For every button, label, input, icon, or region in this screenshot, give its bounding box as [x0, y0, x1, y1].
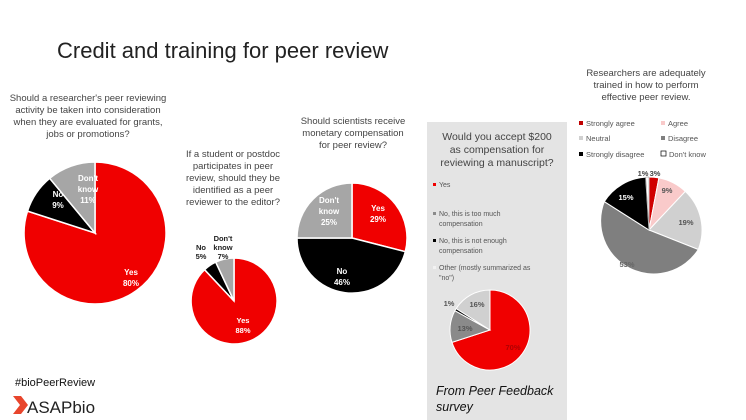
question 1: jobs or promotions? — [45, 129, 130, 140]
question 3: monetary compensation — [302, 128, 404, 139]
question 2: reviewer to the editor? — [186, 197, 280, 208]
question 1: activity be taken into consideration — [15, 105, 161, 116]
pie 3: know — [319, 207, 340, 216]
pie 1: Don't — [78, 174, 98, 183]
legend 5: Agree — [668, 119, 688, 128]
question 2: participates in peer — [193, 161, 273, 172]
caption: From Peer Feedback — [436, 384, 554, 398]
panel: $200 survey: reviewing a manuscript? — [440, 157, 554, 169]
question 1 — [10, 93, 166, 140]
pie 5: 9% — [662, 186, 673, 195]
pie 3: 29% — [370, 215, 386, 224]
legend 5: Disagree — [668, 134, 698, 143]
pie 1: Yes — [124, 268, 138, 277]
question 5: Researchers are adequately — [586, 68, 706, 79]
pie 2: Yes — [237, 316, 249, 325]
caption — [436, 384, 554, 414]
question 5 — [586, 68, 706, 103]
legend 5: Strongly disagree — [586, 150, 644, 159]
question 3 — [301, 116, 405, 151]
legend: No, this is too much — [439, 211, 501, 218]
legend: "no") — [439, 275, 454, 282]
pie 1: 11% — [80, 196, 96, 205]
pie 3: Yes — [371, 204, 385, 213]
pie 4 — [444, 290, 530, 370]
caption: survey — [436, 400, 474, 414]
pie 3: 46% — [334, 278, 350, 287]
legend: No, this is not enough — [439, 238, 507, 245]
pie 1: 80% — [123, 279, 139, 288]
question 3: for peer review? — [319, 140, 387, 151]
pie 3: No — [337, 267, 347, 276]
logo: ASAPbio: ASAPbio — [27, 398, 95, 417]
question 3: Should scientists receive — [301, 116, 405, 127]
pie 2: No — [196, 243, 206, 252]
pie 3: Don't — [319, 196, 339, 205]
legend: Yes — [439, 182, 451, 189]
panel: $200 survey: Would you accept $200 — [442, 131, 552, 143]
panel: $200 survey: as compensation for — [450, 144, 545, 156]
pie 5: 19% — [678, 218, 694, 227]
legend 5: Strongly agree — [586, 119, 635, 128]
legend 5: Neutral — [586, 134, 611, 143]
question 5: effective peer review. — [601, 92, 691, 103]
pie 1: know — [78, 185, 99, 194]
question 2: If a student or postdoc — [186, 149, 280, 160]
pie 2 — [191, 234, 277, 344]
legend: compensation — [439, 221, 483, 228]
hashtag: #bioPeerReview — [15, 377, 95, 389]
question 1: when they are evaluated for grants, — [13, 117, 162, 128]
legend 5: Don't know — [669, 150, 706, 159]
pie 5: 53% — [619, 260, 635, 269]
pie 2: 7% — [218, 252, 229, 261]
pie 5: 1% — [638, 169, 649, 178]
question 5: trained in how to perform — [593, 80, 699, 91]
pie 4: 1% — [444, 299, 455, 308]
legend — [433, 182, 531, 282]
question 1: Should a researcher's peer reviewing — [10, 93, 166, 104]
pie 3: 25% — [321, 218, 337, 227]
legend: Other (mostly summarized as — [439, 265, 531, 272]
question 2: identified as a peer — [193, 185, 273, 196]
pie 2: 88% — [235, 326, 251, 335]
question 2 — [186, 149, 280, 208]
pie 2: know — [213, 243, 233, 252]
pie 5 — [601, 169, 702, 274]
pie 1: No — [53, 190, 63, 199]
pie 2: 5% — [196, 252, 207, 261]
pie 5: 15% — [618, 193, 634, 202]
pie 4: 70% — [505, 343, 521, 352]
title: Credit and training for peer review — [57, 38, 388, 63]
legend 5 — [579, 119, 706, 159]
legend: compensation — [439, 248, 483, 255]
pie 1: 9% — [52, 201, 64, 210]
pie 3 — [297, 183, 407, 293]
pie 2: Don't — [214, 234, 233, 243]
pie 4: 13% — [457, 324, 473, 333]
pie 4: 16% — [469, 300, 485, 309]
pie 1 — [24, 162, 166, 304]
pie 5: 3% — [650, 169, 661, 178]
question 2: review, should they be — [186, 173, 280, 184]
panel: $200 survey — [427, 122, 567, 420]
